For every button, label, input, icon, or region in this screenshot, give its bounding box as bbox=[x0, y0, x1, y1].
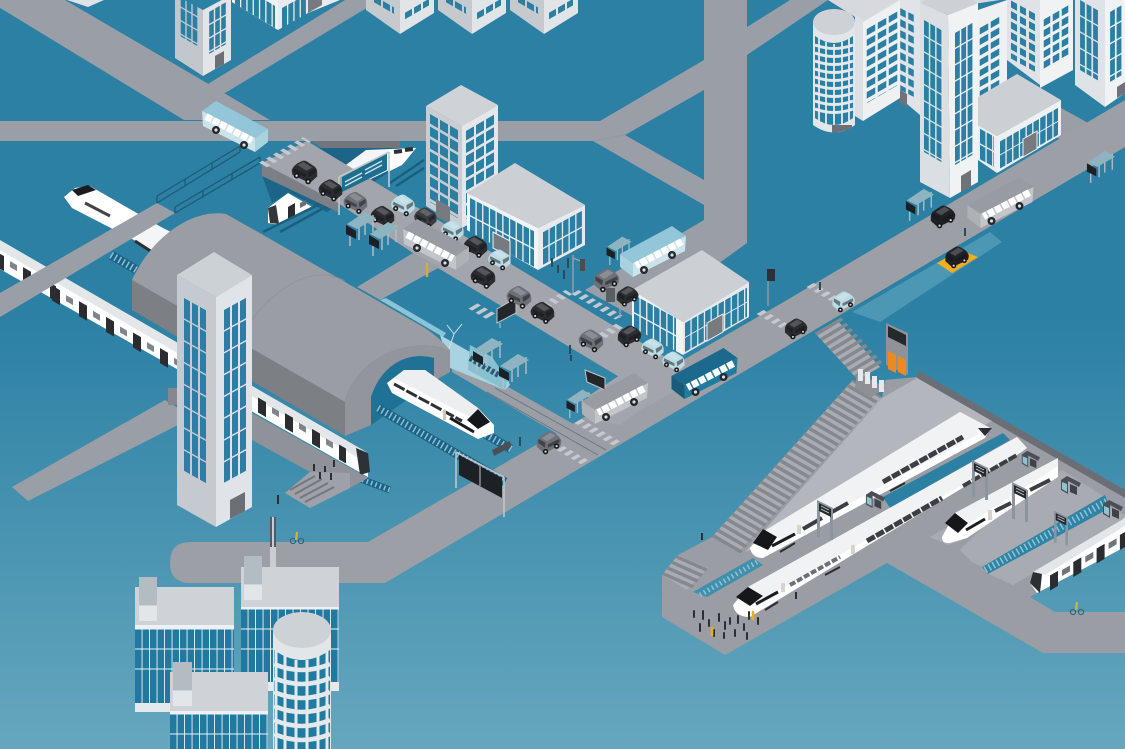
high-speed train leaving hall bbox=[387, 370, 494, 439]
crosswalks bbox=[263, 139, 834, 464]
cyclist near bottom right bbox=[1070, 602, 1084, 615]
train C bbox=[942, 458, 1058, 543]
rail from hall bbox=[378, 408, 511, 482]
bottom building 3 bbox=[170, 662, 268, 749]
low office building C bbox=[632, 250, 749, 355]
street signs bbox=[497, 255, 775, 390]
rail in front of metro bbox=[358, 478, 390, 490]
train A bbox=[750, 412, 992, 558]
people on metro platform bbox=[278, 460, 796, 599]
top right: far tower bbox=[1075, 0, 1125, 107]
station track gaps bbox=[693, 433, 1125, 597]
bottom building 2 bbox=[241, 556, 339, 691]
station gates and sign bbox=[855, 323, 908, 398]
bottom round tower bbox=[273, 612, 331, 749]
train B bbox=[733, 437, 1027, 617]
bridge sign bbox=[339, 152, 389, 215]
rail under bridge bbox=[263, 160, 424, 232]
cyclist near main road bbox=[290, 532, 304, 544]
buses bbox=[202, 101, 1034, 424]
shelters on avenue bbox=[346, 151, 1115, 418]
top left building stub bbox=[67, 0, 104, 7]
metro train main bbox=[0, 239, 370, 477]
under-bridge shade bbox=[262, 148, 400, 212]
crowd of people bbox=[694, 611, 758, 639]
pole near main road bbox=[270, 517, 276, 567]
road network: upper streets bbox=[0, 0, 1090, 501]
bottom building 1 bbox=[135, 577, 234, 712]
far high-speed train bbox=[64, 185, 180, 256]
station hall bbox=[132, 213, 450, 436]
left road crossing trains bbox=[0, 203, 175, 317]
tram shelters bbox=[473, 338, 529, 388]
gantry sign over avenue bbox=[456, 452, 504, 517]
top left glass block bbox=[232, 0, 340, 30]
tram behind bridge bbox=[343, 148, 416, 188]
rail: far left bbox=[111, 255, 140, 272]
people on avenue bbox=[520, 228, 965, 446]
street cars bbox=[292, 161, 969, 454]
station stairs bbox=[662, 320, 882, 590]
parking strip bbox=[852, 232, 1002, 322]
train D metro bbox=[1030, 518, 1125, 593]
top left tower bbox=[175, 0, 231, 76]
big tower bbox=[177, 252, 252, 527]
platform gantries bbox=[817, 460, 1068, 546]
top right: tall tower bbox=[920, 0, 978, 198]
top right: round tower bbox=[813, 9, 855, 133]
low office building B bbox=[467, 163, 585, 270]
metro platform and steps bbox=[252, 413, 368, 508]
top right: mid-rise block bbox=[828, 0, 1073, 121]
bridge railings bbox=[157, 146, 260, 213]
top row boxes bbox=[366, 0, 578, 34]
road: main avenue bbox=[170, 100, 1125, 583]
yellow cyclist by connector bbox=[426, 263, 428, 277]
small box behind tower bbox=[168, 388, 180, 405]
office tower centre bbox=[426, 85, 498, 228]
tram below bridge bbox=[268, 193, 312, 225]
avenue with overpass bbox=[262, 141, 700, 425]
platform shelters bbox=[866, 451, 1123, 519]
tram and tunnel rail right of hall bbox=[380, 298, 612, 456]
top right: low building D bbox=[978, 74, 1061, 173]
station platform base bbox=[662, 370, 1125, 655]
